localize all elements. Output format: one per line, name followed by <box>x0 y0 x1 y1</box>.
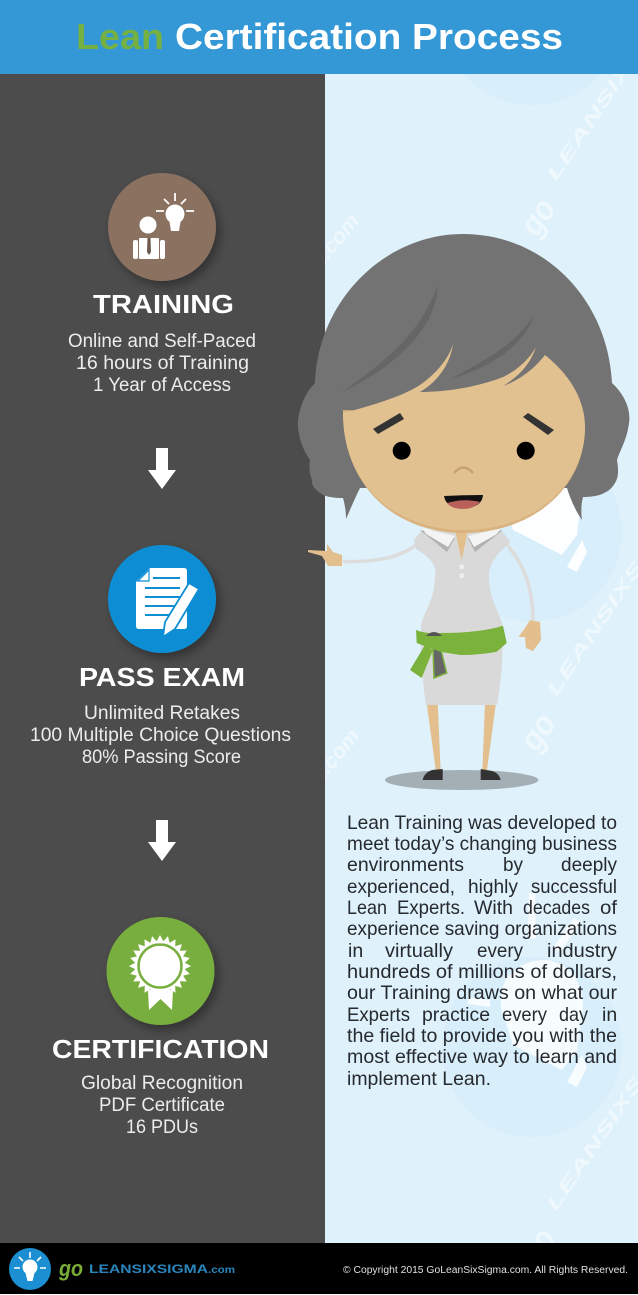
panel: right background with watermark: LEANSIXSIGMA <box>543 1004 638 1214</box>
text: training details <box>68 331 256 396</box>
panel: right background with watermark: LEANSIXSIGMA <box>543 0 638 184</box>
text block: lean training description: highly <box>468 876 518 898</box>
character: woman pointing <box>298 234 629 790</box>
shoes <box>423 769 501 780</box>
text block: lean training description: our Training draws on what our <box>347 982 618 1004</box>
collar <box>420 528 503 560</box>
panel: right background with watermark: go <box>512 191 564 243</box>
text block: lean training description: the field to provide you with the <box>347 1025 617 1047</box>
left arm and pointing hand <box>308 544 417 566</box>
text block: lean training description: decades <box>523 897 590 919</box>
header band <box>0 0 638 74</box>
eyebrows <box>373 413 554 435</box>
text: training details: Online and Self-Paced <box>68 331 256 352</box>
right arm and hand <box>507 545 541 651</box>
panel: right background with watermark: A.com <box>304 725 364 791</box>
text block: lean training description: every <box>477 940 523 962</box>
text block: lean training description: experienced, <box>347 876 455 898</box>
text block: lean training description: in <box>602 1004 617 1026</box>
text block: lean training description: practice <box>422 1004 490 1026</box>
text block: lean training description: Lean Training was developed to <box>347 812 617 834</box>
dress <box>414 530 510 705</box>
text block: lean training description: meet today’s changing business <box>347 833 617 855</box>
panel: left dark column <box>0 74 325 1243</box>
text block: lean training description: virtually <box>385 940 453 962</box>
footer logo: .com <box>208 1265 235 1276</box>
footer logo: LEANSIXSIGMA <box>89 1262 208 1276</box>
icon: exam circle <box>108 545 216 653</box>
text block: lean training description: experience saving organizations <box>347 918 617 940</box>
text: certification details: Global Recognition <box>81 1073 243 1094</box>
panel: right background with watermark: go <box>512 706 564 758</box>
hair strands <box>342 285 534 392</box>
text block: lean training description: of <box>600 897 618 919</box>
text block: lean training description: Experts. <box>397 897 465 919</box>
mouth <box>444 495 483 509</box>
footer logo <box>9 1248 235 1290</box>
text: certification details: PDF Certificate <box>99 1095 225 1116</box>
text: exam details: 80% Passing Score <box>82 747 241 768</box>
arrow 2 <box>148 820 176 861</box>
heading: certification: CERTIFICATION <box>52 1034 269 1064</box>
text block: lean training description: Experts <box>347 1004 410 1026</box>
title: Certification Process <box>175 16 563 57</box>
copyright: © Copyright 2015 GoLeanSixSigma.com. All Rights Reserved. <box>343 1265 628 1276</box>
text block: lean training description: day <box>559 1004 588 1026</box>
text: exam details <box>30 703 291 768</box>
green belt <box>410 626 507 678</box>
eyes <box>393 442 535 460</box>
text: certification details <box>81 1073 243 1138</box>
hair <box>298 234 629 520</box>
text block: lean training description: most effective way to learn and <box>347 1046 617 1068</box>
text: exam details: Unlimited Retakes <box>84 703 240 724</box>
text block: lean training description: With <box>474 897 513 919</box>
text block: lean training description: by <box>503 854 523 876</box>
text: exam details: 100 Multiple Choice Questions <box>30 725 291 746</box>
buttons <box>459 564 464 578</box>
shadow <box>385 770 538 790</box>
face <box>343 344 585 533</box>
footer bar <box>0 1243 638 1294</box>
text block: lean training description <box>347 812 618 1090</box>
panel: right background with watermark: go <box>512 1221 564 1273</box>
footer logo: go <box>58 1256 83 1281</box>
text: certification details: 16 PDUs <box>126 1117 198 1138</box>
text block: lean training description: every <box>502 1004 547 1026</box>
text block: lean training description: implement Lean. <box>347 1068 491 1090</box>
icon: certification circle <box>106 917 214 1025</box>
text block: lean training description: deeply <box>561 854 617 876</box>
text: training details: 16 hours of Training <box>76 353 249 374</box>
text block: lean training description: successful <box>531 876 617 898</box>
icon: training circle <box>108 173 216 281</box>
title: Lean <box>76 16 164 57</box>
heading: pass exam: PASS EXAM <box>79 662 245 692</box>
text: training details: 1 Year of Access <box>93 375 231 396</box>
nose <box>454 468 473 473</box>
panel: right background with watermark: A.com <box>304 210 364 276</box>
heading: training: TRAINING <box>93 289 234 319</box>
legs <box>427 703 496 772</box>
text block: lean training description: in <box>348 940 363 962</box>
panel: right background with watermark: LEANSIXSIGMA <box>543 489 638 699</box>
text block: lean training description: hundreds of millions of dollars, <box>347 961 617 983</box>
panel: right background with watermark <box>325 74 638 1243</box>
text block: lean training description: environments <box>347 854 464 876</box>
text block: lean training description: Lean <box>347 897 387 919</box>
text block: lean training description: industry <box>547 940 617 962</box>
arrow 1 <box>148 448 176 489</box>
